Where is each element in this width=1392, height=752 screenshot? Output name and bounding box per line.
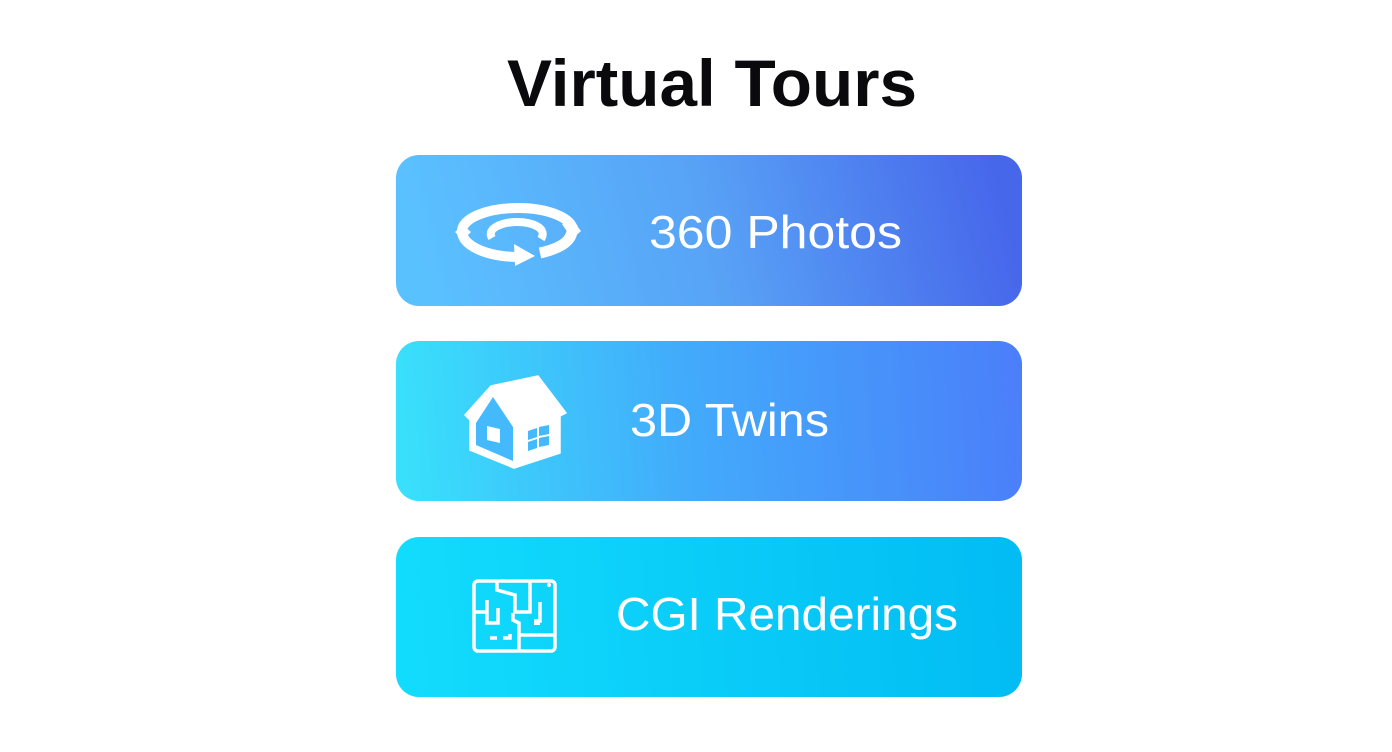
panel: 360 Photos <box>396 155 1022 306</box>
icon: 360 rotation <box>455 208 581 266</box>
label: 3D Twins: 3D Twins <box>630 394 829 446</box>
panel: CGI Renderings <box>396 537 1022 697</box>
panel: 3D Twins <box>396 341 1022 501</box>
icon: house <box>465 376 566 468</box>
label: 360 Photos: 360 Photos <box>649 206 902 258</box>
title: Virtual Tours <box>507 46 917 120</box>
card background: CGI Renderings <box>396 537 1022 697</box>
icon: floor plan <box>474 581 555 651</box>
label: CGI Renderings: CGI Renderings <box>616 588 958 640</box>
card background: 3D Twins <box>396 341 1022 501</box>
card background: 360 Photos <box>396 155 1022 306</box>
